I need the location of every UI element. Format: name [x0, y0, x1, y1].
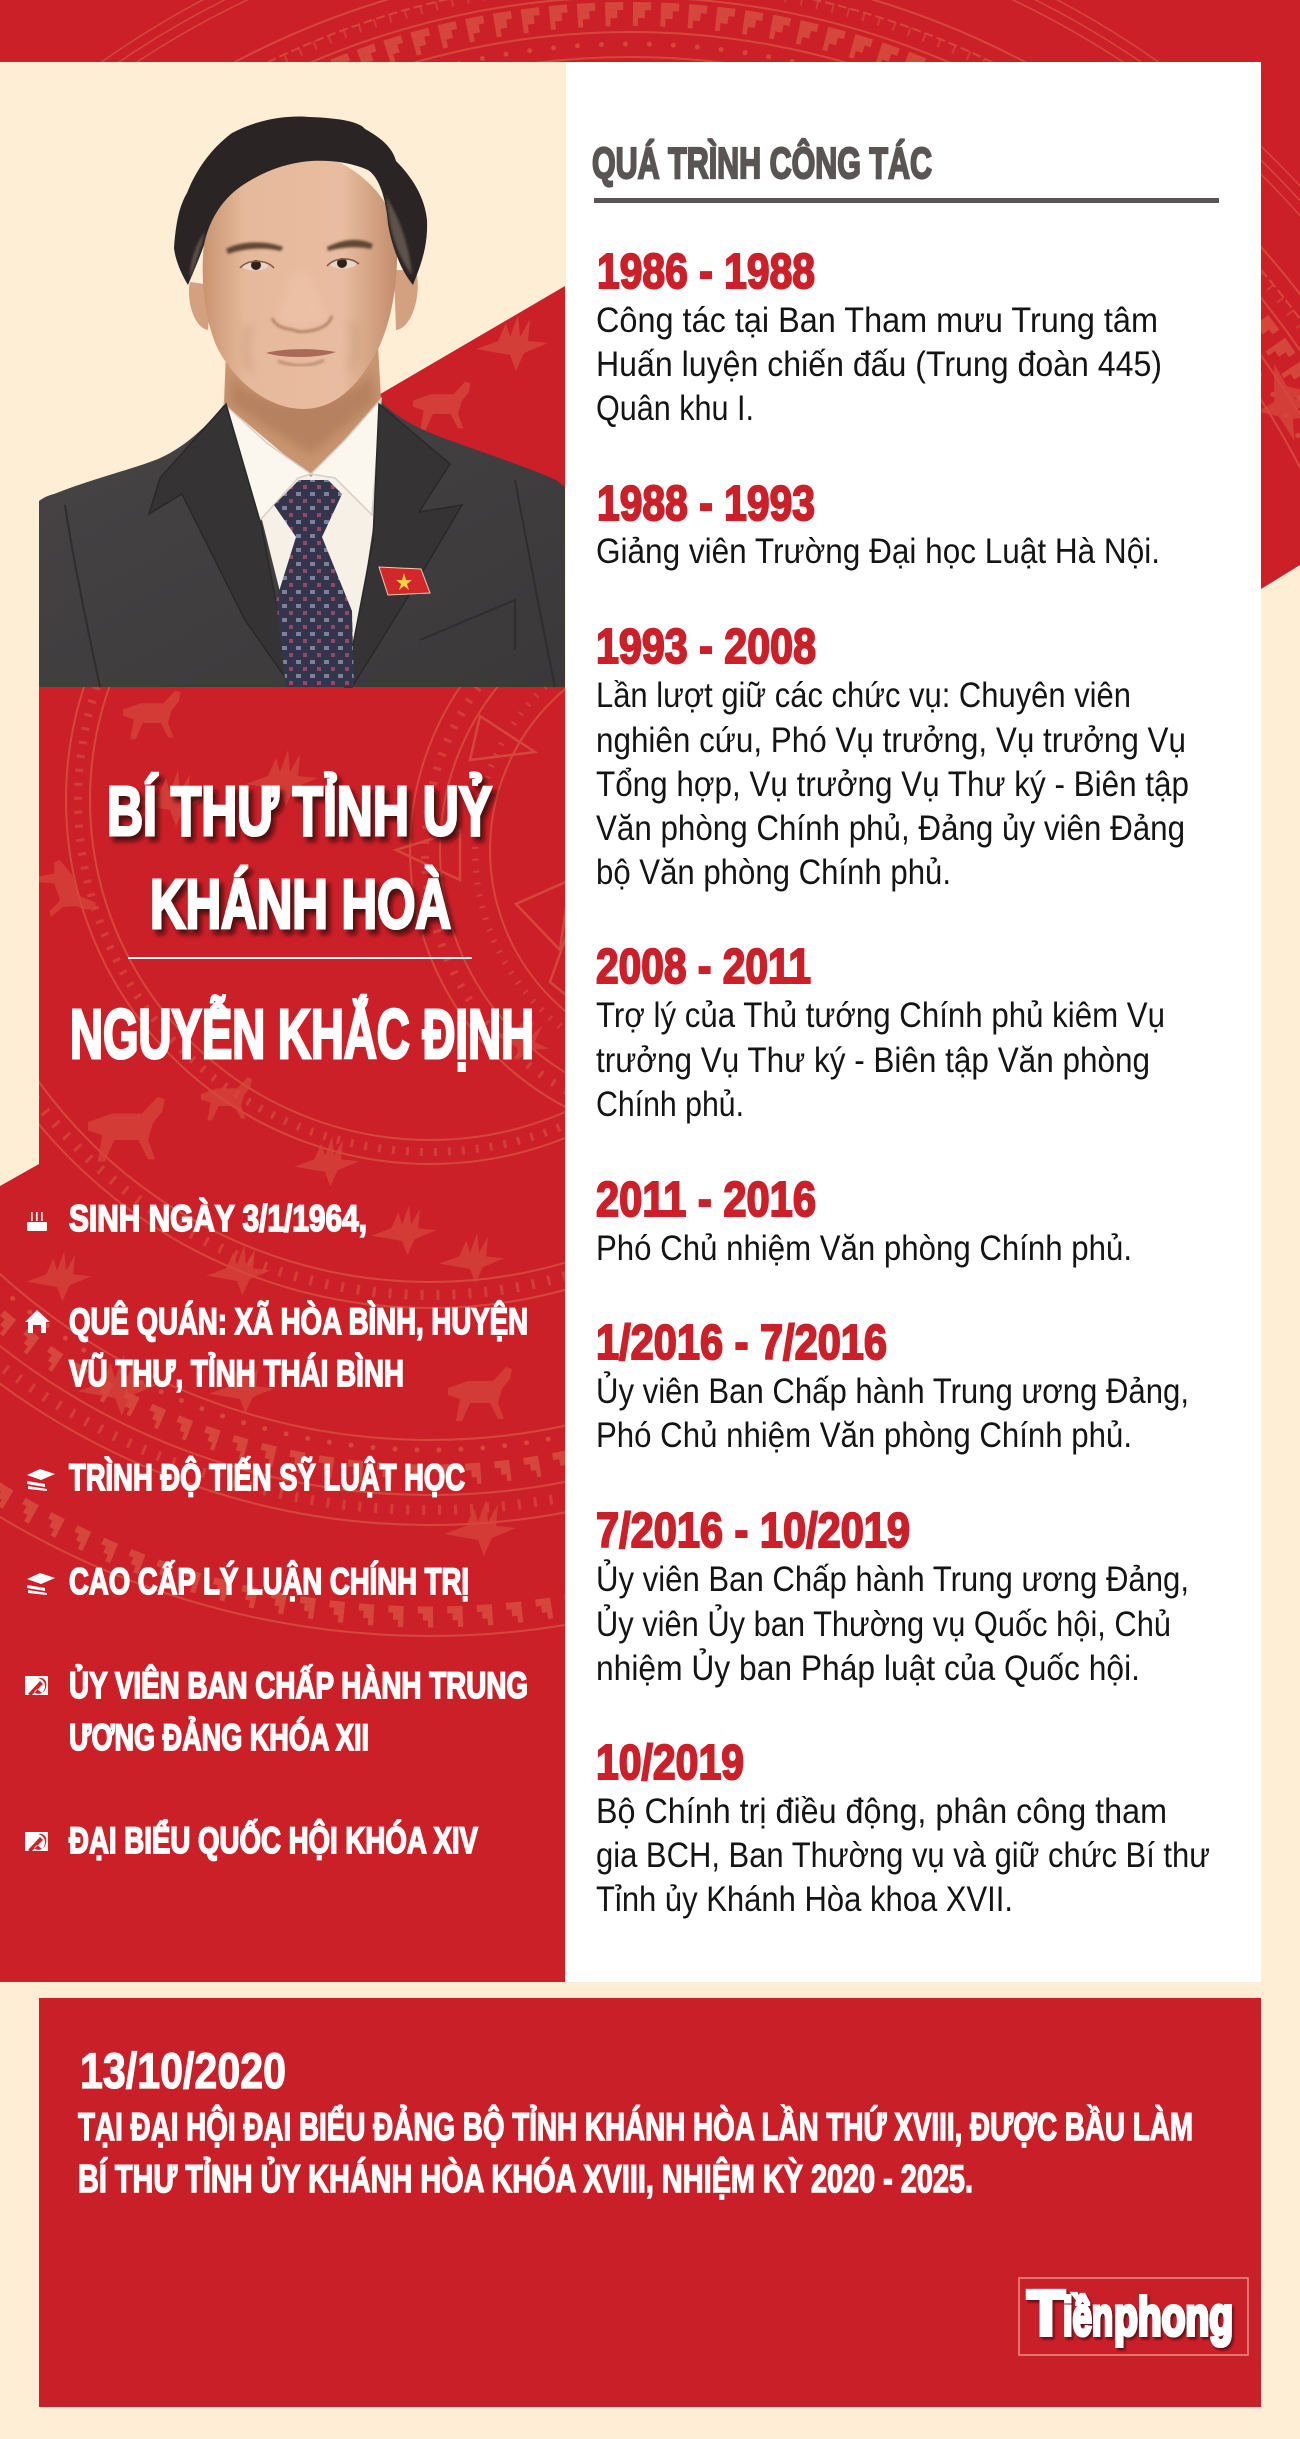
top red band with drum pattern	[0, 0, 1300, 589]
timeline entry 1993-2008: Tổng hợp, Vụ trưởng Vụ Thư ký - Biên tập	[596, 765, 1189, 804]
note text	[78, 2104, 1193, 2201]
timeline entry 7/2016-10/2019: Ủy viên Ủy ban Thường vụ Quốc hội, Chủ	[596, 1604, 1171, 1644]
timeline entry 7/2016-10/2019	[596, 1504, 1189, 1688]
timeline entry 1988-1993: 1988 - 1993	[597, 477, 815, 531]
timeline entry 1/2016-7/2016: 1/2016 - 7/2016	[596, 1316, 887, 1370]
icon: graduation cap	[27, 1573, 55, 1595]
logo: Tiền Phong	[1019, 2277, 1248, 2355]
timeline entry 1986-1988: 1986 - 1988	[597, 245, 815, 299]
title line 2: KHÁNH HOÀ	[150, 865, 451, 943]
title: position and name	[70, 772, 534, 1073]
timeline entry 1/2016-7/2016: Phó Chủ nhiệm Văn phòng Chính phủ.	[596, 1416, 1132, 1455]
shirt	[224, 399, 381, 687]
timeline entry 2011-2016: Phó Chủ nhiệm Văn phòng Chính phủ.	[596, 1229, 1132, 1268]
hair	[174, 116, 427, 285]
title divider	[128, 957, 472, 959]
timeline entry 1988-1993: Giảng viên Trường Đại học Luật Hà Nội.	[596, 532, 1160, 571]
timeline entry 10/2019: Bộ Chính trị điều động, phân công tham	[596, 1792, 1167, 1831]
heading rule	[594, 198, 1219, 203]
facial features	[226, 240, 373, 372]
logo: Tiền Phong: T	[1027, 2277, 1065, 2349]
timeline entry 7/2016-10/2019: 7/2016 - 10/2019	[596, 1504, 910, 1558]
profile list	[25, 1198, 528, 1861]
timeline entry 2011-2016: 2011 - 2016	[596, 1173, 816, 1227]
timeline entry 7/2016-10/2019: Ủy viên Ban Chấp hành Trung ương Đảng,	[596, 1559, 1189, 1599]
timeline entry 1993-2008	[596, 620, 1189, 892]
home town	[69, 1300, 528, 1394]
timeline entry 10/2019: Tỉnh ủy Khánh Hòa khoa XVII.	[596, 1880, 1013, 1919]
timeline entry 1986-1988: Công tác tại Ban Tham mưu Trung tâm	[596, 301, 1158, 340]
national assembly: ĐẠI BIỂU QUỐC HỘI KHÓA XIV	[69, 1819, 478, 1861]
logo: Tiền Phong: phong	[1114, 2287, 1233, 2347]
central committee	[69, 1664, 528, 1758]
date: 13/10/2020	[80, 2043, 286, 2099]
ears	[189, 270, 418, 330]
timeline entry 1986-1988	[596, 245, 1162, 428]
timeline entry 1986-1988: Quân khu I.	[596, 389, 754, 428]
panel: bottom election note	[39, 1998, 1261, 2407]
title line 1: BÍ THƯ TỈNH UỶ	[107, 772, 492, 850]
timeline entry 2008-2011: trưởng Vụ Thư ký - Biên tập Văn phòng	[596, 1041, 1150, 1080]
panel: left red profile panel	[0, 687, 565, 1982]
timeline entry 7/2016-10/2019: nhiệm Ủy ban Pháp luật của Quốc hội.	[596, 1648, 1140, 1688]
note text: BÍ THƯ TỈNH ỦY KHÁNH HÒA KHÓA XVIII, NHIỆM KỲ 2020 - 2025.	[78, 2157, 973, 2201]
suit jacket	[39, 399, 565, 687]
home town: VŨ THƯ, TỈNH THÁI BÌNH	[69, 1352, 404, 1394]
timeline entry 2008-2011: Trợ lý của Thủ tướng Chính phủ kiêm Vụ	[596, 996, 1165, 1035]
timeline entry 1993-2008: bộ Văn phòng Chính phủ.	[596, 853, 951, 892]
timeline entry 10/2019	[596, 1736, 1210, 1919]
name: NGUYỄN KHẮC ĐỊNH	[70, 994, 534, 1073]
panel: white career panel	[566, 62, 1261, 1982]
timeline entry 2011-2016	[596, 1173, 1132, 1268]
central committee: ƯƠNG ĐẢNG KHÓA XII	[69, 1716, 369, 1758]
timeline entry 2008-2011	[596, 940, 1165, 1124]
timeline entry 1993-2008: Văn phòng Chính phủ, Đảng ủy viên Đảng	[596, 809, 1185, 848]
icon: party flag	[25, 1832, 48, 1852]
timeline entry 1988-1993	[596, 477, 1160, 571]
central committee: ỦY VIÊN BAN CHẤP HÀNH TRUNG	[69, 1664, 528, 1706]
timeline entry 1993-2008: 1993 - 2008	[596, 620, 816, 674]
timeline entry 1993-2008: nghiên cứu, Phó Vụ trưởng, Vụ trưởng Vụ	[596, 721, 1186, 760]
head	[203, 150, 397, 409]
timeline entry 10/2019: gia BCH, Ban Thường vụ và giữ chức Bí thư	[596, 1836, 1210, 1875]
education: TRÌNH ĐỘ TIẾN SỸ LUẬT HỌC	[69, 1456, 465, 1498]
timeline entry 1986-1988: Huấn luyện chiến đấu (Trung đoàn 445)	[596, 345, 1162, 384]
timeline entry 10/2019: 10/2019	[596, 1736, 744, 1790]
timeline entry 1/2016-7/2016: Ủy viên Ban Chấp hành Trung ương Đảng,	[596, 1371, 1189, 1411]
grey temples	[190, 196, 412, 278]
timeline entry 2008-2011: Chính phủ.	[596, 1085, 744, 1124]
home town: QUÊ QUÁN: XÃ HÒA BÌNH, HUYỆN	[69, 1300, 528, 1342]
logo: Tiền Phong: iền	[1063, 2287, 1113, 2347]
timeline entry 1/2016-7/2016	[596, 1316, 1189, 1455]
photo: portrait of Nguyễn Khắc Định	[39, 116, 565, 687]
neck	[224, 345, 381, 480]
icon: birthday cake	[27, 1212, 47, 1231]
timeline entry 1993-2008: Lần lượt giữ các chức vụ: Chuyên viên	[596, 676, 1131, 715]
lapels	[149, 404, 462, 687]
icon: house	[25, 1310, 50, 1333]
heading: career history: QUÁ TRÌNH CÔNG TÁC	[592, 137, 932, 188]
timeline entry 2008-2011: 2008 - 2011	[596, 940, 811, 994]
icon: party flag	[25, 1676, 48, 1696]
birth date: SINH NGÀY 3/1/1964,	[69, 1198, 367, 1239]
icon: graduation cap	[27, 1469, 55, 1491]
lapel pin	[379, 567, 430, 595]
political theory: CAO CẤP LÝ LUẬN CHÍNH TRỊ	[69, 1560, 469, 1602]
tie	[274, 480, 354, 687]
